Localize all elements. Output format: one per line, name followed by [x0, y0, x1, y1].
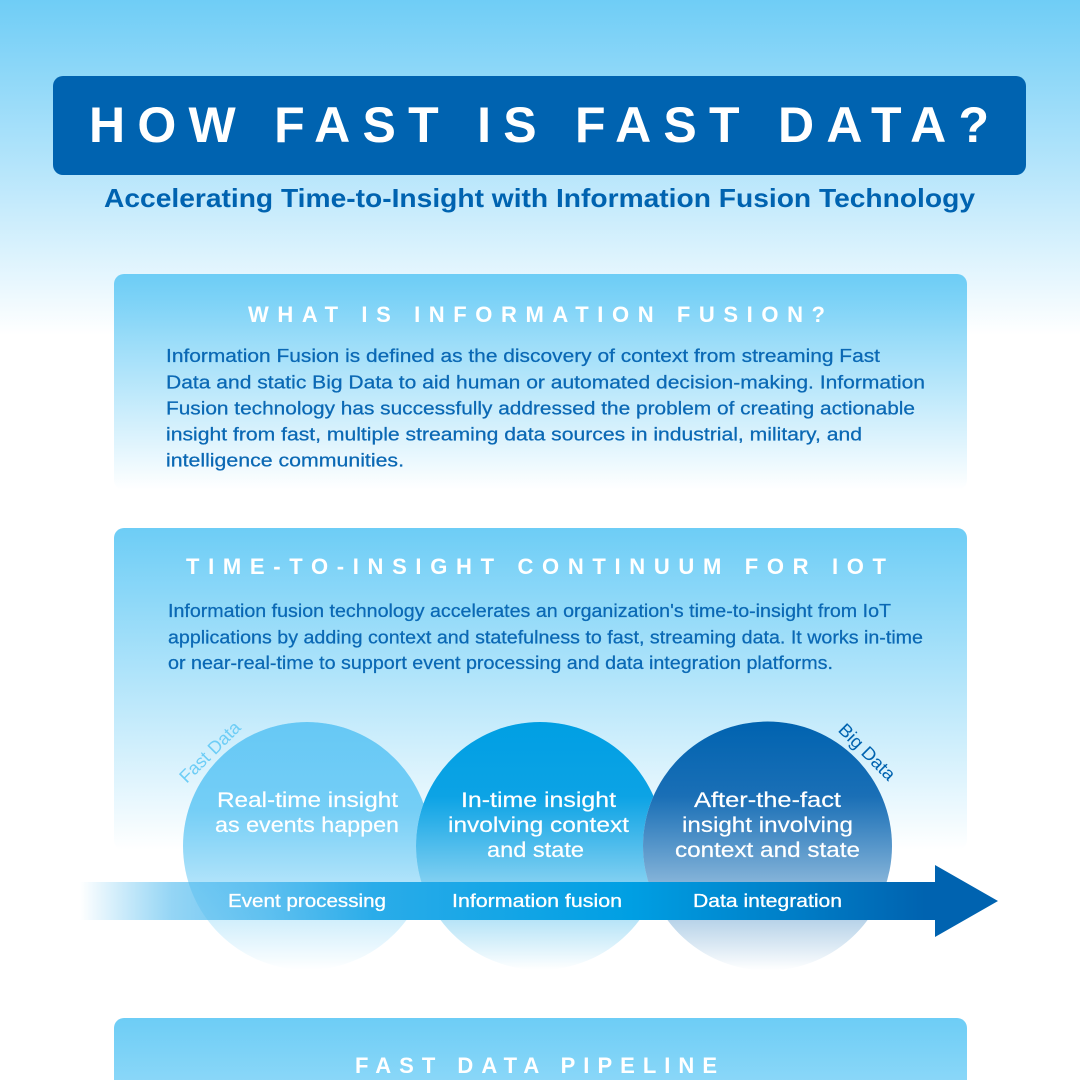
- text block: continuum description: [168, 600, 923, 673]
- circle: after-the-fact insight: After-the-fact: [694, 789, 841, 812]
- circle: after-the-fact insight: insight involving: [682, 814, 853, 837]
- circle: real-time insight: Real-time insight: [217, 789, 398, 812]
- text block: definition: intelligence communities.: [166, 450, 404, 470]
- panel: time-to-insight continuum: [114, 528, 967, 850]
- text block: definition: [166, 345, 925, 470]
- circle: real-time insight: [183, 722, 431, 970]
- circle: after-the-fact insight: context and state: [675, 839, 860, 862]
- title banner: [53, 76, 1026, 175]
- arrow label: event processing: Event processing: [228, 890, 386, 911]
- arrow label: data integration: Data integration: [693, 890, 842, 911]
- circle: in-time insight: [416, 722, 664, 970]
- title: HOW FAST IS FAST DATA?: [89, 97, 989, 153]
- label: big data: Big Data: [834, 719, 900, 785]
- text block: definition: Fusion technology has successfully addressed the problem of creating actionable: [166, 398, 915, 418]
- text block: continuum description: applications by adding context and statefulness to fast, streaming data. It works in-time: [168, 626, 923, 648]
- text block: continuum description: or near-real-time to support event processing and data integration platforms.: [168, 652, 833, 673]
- heading: time-to-insight continuum: TIME-TO-INSIGHT CONTINUUM FOR IOT: [186, 554, 887, 579]
- circle: in-time insight: involving context: [448, 814, 629, 837]
- panel: fast data pipeline: [114, 1018, 967, 1080]
- panel: what is information fusion: [114, 274, 967, 490]
- circle: real-time insight: as events happen: [215, 814, 399, 837]
- subtitle: Accelerating Time-to-Insight with Information Fusion Technology: [104, 183, 976, 213]
- arrow label: information fusion: Information fusion: [452, 890, 622, 911]
- heading: what is information fusion: WHAT IS INFORMATION FUSION?: [248, 302, 825, 327]
- heading: fast data pipeline: FAST DATA PIPELINE: [355, 1053, 717, 1078]
- arrow: time-to-insight continuum: [80, 865, 998, 937]
- text block: definition: Information Fusion is defined as the discovery of context from streaming Fast: [166, 345, 880, 366]
- text block: definition: Data and static Big Data to aid human or automated decision-making. Information: [166, 372, 925, 392]
- text block: continuum description: Information fusion technology accelerates an organization's time-to-insight from IoT: [168, 600, 891, 621]
- text block: definition: insight from fast, multiple streaming data sources in industrial, military, and: [166, 424, 862, 444]
- page background: [0, 0, 1080, 335]
- circle: after-the-fact insight: [643, 722, 892, 970]
- circle: in-time insight: and state: [487, 839, 584, 862]
- circle: in-time insight: In-time insight: [461, 789, 616, 812]
- label: fast data: Fast Data: [175, 717, 245, 787]
